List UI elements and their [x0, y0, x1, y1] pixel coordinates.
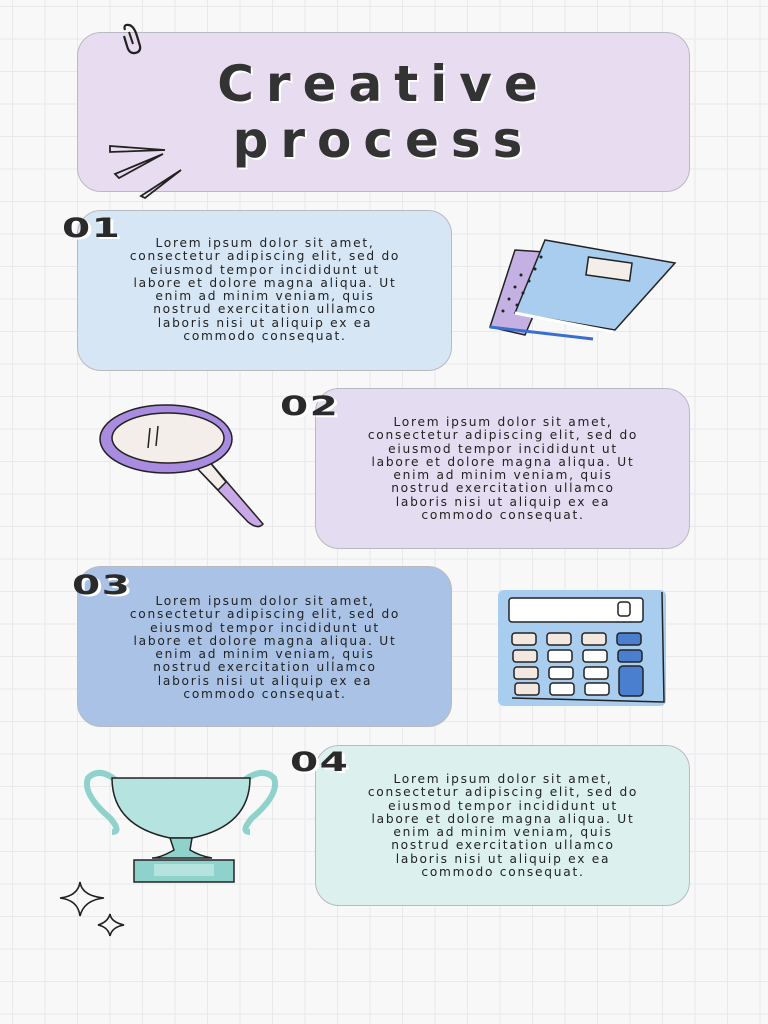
icon: trophy: [84, 770, 278, 883]
text block 02: commodo consequat.: [421, 508, 585, 522]
text block 02: nostrud exercitation ullamco: [391, 481, 615, 495]
text block 04: enim ad minim veniam, quis: [393, 825, 613, 839]
text block 02: enim ad minim veniam, quis: [393, 468, 613, 482]
icon: magnifying glass: [99, 404, 264, 528]
text block 01: enim ad minim veniam, quis: [155, 289, 375, 303]
text block 01: Lorem ipsum dolor sit amet,: [155, 236, 374, 250]
panel: step 03: [77, 566, 452, 727]
panel: title: [77, 32, 690, 192]
title: process: [233, 111, 534, 169]
text block 04: eiusmod tempor incididunt ut: [388, 799, 618, 813]
text block 03: enim ad minim veniam, quis: [155, 647, 375, 661]
text block 03: labore et dolore magna aliqua. Ut: [134, 634, 396, 648]
text block 01: laboris nisi ut aliquip ex ea: [158, 316, 372, 330]
text block 02: eiusmod tempor incididunt ut: [388, 442, 618, 456]
text block 03: [130, 594, 400, 701]
panel: step 02: [315, 388, 690, 549]
icon: paper clip: [123, 24, 142, 54]
number 04: 04: [290, 747, 349, 778]
text block 03: consectetur adipiscing elit, sed do: [130, 607, 400, 621]
text block 04: nostrud exercitation ullamco: [391, 838, 615, 852]
text block 02: [368, 415, 638, 522]
number 01: 01: [62, 213, 121, 244]
text block 03: Lorem ipsum dolor sit amet,: [155, 594, 374, 608]
text block 02: labore et dolore magna aliqua. Ut: [372, 455, 634, 469]
text block 02: Lorem ipsum dolor sit amet,: [393, 415, 612, 429]
number 03: 03: [72, 570, 131, 601]
text block 02: laboris nisi ut aliquip ex ea: [396, 495, 610, 509]
number 02: 02: [280, 391, 339, 422]
text block 04: laboris nisi ut aliquip ex ea: [396, 852, 610, 866]
text block 04: labore et dolore magna aliqua. Ut: [372, 812, 634, 826]
title: Creative: [217, 55, 550, 113]
panel: step 04: [315, 745, 690, 906]
text block 01: eiusmod tempor incididunt ut: [150, 263, 380, 277]
text block 04: commodo consequat.: [421, 865, 585, 879]
text block 04: consectetur adipiscing elit, sed do: [368, 785, 638, 799]
text block 01: nostrud exercitation ullamco: [153, 302, 377, 316]
text block 02: consectetur adipiscing elit, sed do: [368, 428, 638, 442]
text block 03: laboris nisi ut aliquip ex ea: [158, 674, 372, 688]
text block 04: [368, 772, 638, 879]
icon: sparkles: [60, 882, 124, 936]
icon: notebooks: [489, 239, 676, 340]
text block 03: eiusmod tempor incididunt ut: [150, 621, 380, 635]
text block 01: commodo consequat.: [183, 329, 347, 343]
text block 01: labore et dolore magna aliqua. Ut: [134, 276, 396, 290]
text block 01: consectetur adipiscing elit, sed do: [130, 249, 400, 263]
text block 03: nostrud exercitation ullamco: [153, 660, 377, 674]
panel: step 01: [77, 210, 452, 371]
icon: burst lines: [109, 145, 182, 199]
text block 04: Lorem ipsum dolor sit amet,: [393, 772, 612, 786]
text block 01: [130, 236, 400, 343]
icon: calculator: [498, 590, 666, 706]
title: [217, 55, 550, 170]
text block 03: commodo consequat.: [183, 687, 347, 701]
